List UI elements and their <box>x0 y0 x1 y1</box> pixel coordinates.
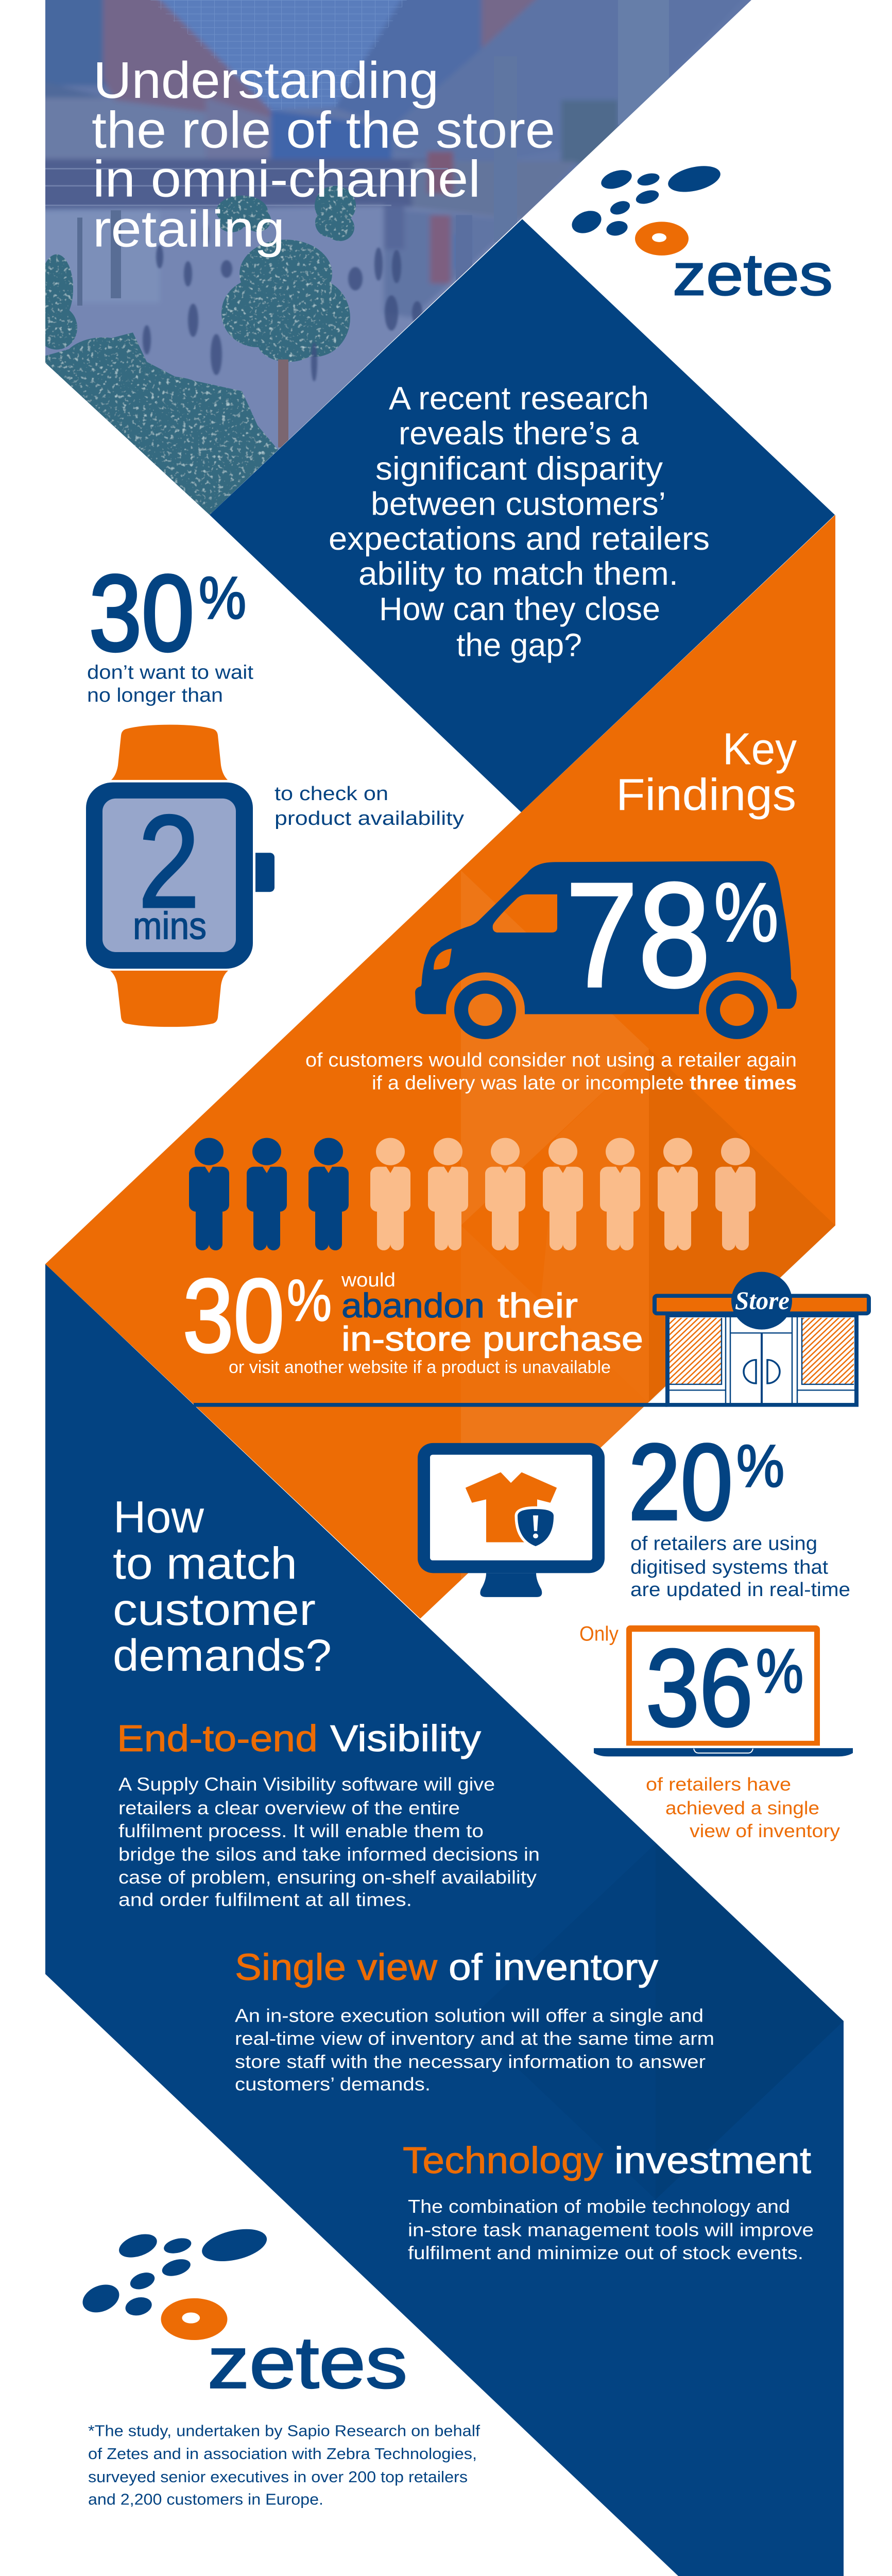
people row: 3 in 10 <box>189 1138 756 1250</box>
stat: 30% abandon purchase: abandon <box>341 1287 485 1325</box>
section: single view of inventory: of inventory <box>449 1946 658 1988</box>
section: end-to-end visibility <box>117 1718 540 1910</box>
section: end-to-end visibility: bridge the silos and take informed decisions in <box>118 1843 540 1865</box>
text: late delivery caption <box>305 1049 797 1094</box>
icon: laptop with 36% <box>579 1622 853 1756</box>
section: single view of inventory <box>235 1946 714 2094</box>
logo: zetes bottom <box>78 2224 407 2403</box>
stat: 20% digitised systems: digitised systems that <box>630 1556 828 1578</box>
heading: how to match customer demands: customer <box>113 1585 316 1635</box>
section: single view of inventory: An in-store execution solution will offer a single and <box>235 2005 704 2026</box>
section: single view of inventory: Single view <box>235 1946 438 1988</box>
footnote: and 2,200 customers in Europe. <box>88 2490 323 2508</box>
stat: 30% abandon purchase: would <box>341 1269 396 1291</box>
icon: smartwatch 2 mins: mins <box>133 905 207 947</box>
columns <box>77 0 669 306</box>
text: late delivery caption: three times <box>690 1073 797 1094</box>
stat: 30% abandon purchase: their <box>498 1287 578 1325</box>
intro text: expectations and retailers <box>329 520 710 556</box>
text: late delivery caption: of customers would consider not using a retailer again <box>305 1049 797 1071</box>
icon: laptop with 36%: 36 <box>646 1627 753 1749</box>
heading: key findings <box>616 724 797 820</box>
icon: delivery van with 78% <box>415 852 797 1039</box>
stat: 20% digitised systems: 20 <box>628 1421 733 1543</box>
text: single view of inventory stat <box>646 1774 840 1841</box>
footnote: surveyed senior executives in over 200 top retailers <box>88 2468 468 2486</box>
icon: delivery van with 78%: 78 <box>565 852 711 1018</box>
photo: shopping mall interior with blue tint <box>31 0 762 523</box>
stat: 20% digitised systems: of retailers are using <box>630 1533 817 1554</box>
ceiling grid <box>150 0 407 110</box>
logo: zetes bottom: zetes <box>208 2321 407 2403</box>
icon: laptop with 36%: % <box>756 1637 803 1706</box>
heading: how to match customer demands: demands? <box>113 1631 332 1681</box>
text: single view of inventory stat: view of inventory <box>690 1820 840 1841</box>
section: single view of inventory: customers’ demands. <box>235 2073 431 2094</box>
stat: 30% don't want to wait: don’t want to wait <box>87 662 253 683</box>
footnote: *The study, undertaken by Sapio Research on behalf <box>88 2422 480 2439</box>
intro text: How can they close <box>379 591 660 627</box>
title: Understanding <box>93 50 439 109</box>
icon: monitor with shirt <box>418 1443 605 1597</box>
text: to check on product availability <box>275 783 465 829</box>
section: end-to-end visibility: retailers a clear overview of the entire <box>118 1797 460 1818</box>
section: technology investment: investment <box>614 2140 811 2181</box>
heading: key findings: Findings <box>616 770 796 820</box>
text: to check on product availability: product availability <box>275 808 465 829</box>
divider line to store <box>194 1403 667 1407</box>
intro text: the gap? <box>456 627 582 663</box>
tree trunk <box>278 360 288 447</box>
text: to check on product availability: to check on <box>275 783 388 805</box>
stat: 30% don't want to wait: % <box>199 565 246 632</box>
stat: 30% abandon purchase: in-store purchase <box>341 1320 643 1358</box>
section: single view of inventory: real-time view of inventory and at the same time arm <box>235 2028 714 2049</box>
railing <box>45 168 448 206</box>
section: technology investment: fulfilment and minimize out of stock events. <box>408 2242 803 2263</box>
stat: 30% abandon purchase <box>183 1258 643 1377</box>
section: technology investment: in-store task management tools will improve <box>408 2219 814 2240</box>
heading: how to match customer demands: How <box>113 1493 204 1543</box>
section: end-to-end visibility: Visibility <box>330 1718 481 1759</box>
logo: zetes top <box>568 161 833 308</box>
section: technology investment: Technology <box>403 2140 603 2181</box>
text: late delivery caption: if a delivery was late or incomplete <box>372 1073 684 1094</box>
stat: 30% don't want to wait: no longer than <box>87 685 223 706</box>
heading: key findings: Key <box>723 724 797 774</box>
icon: smartwatch 2 mins <box>86 725 275 1027</box>
heading: how to match customer demands: to match <box>113 1539 297 1589</box>
title: the role of the store <box>92 100 555 159</box>
stat: 30% don't want to wait <box>87 552 253 706</box>
stat: 30% abandon purchase: % <box>287 1267 332 1333</box>
section: end-to-end visibility: A Supply Chain Visibility software will give <box>118 1774 495 1794</box>
icon: store front <box>655 1272 869 1405</box>
stat: 20% digitised systems: are updated in real-time <box>630 1579 850 1601</box>
people <box>143 224 422 381</box>
section: end-to-end visibility: End-to-end <box>117 1718 318 1759</box>
section: technology investment <box>403 2140 814 2263</box>
icon: store front: Store <box>735 1286 790 1315</box>
section: technology investment: The combination of mobile technology and <box>408 2196 790 2217</box>
footnote: of Zetes and in association with Zebra Technologies, <box>88 2445 477 2463</box>
stat: 30% don't want to wait: 30 <box>89 552 194 673</box>
logo: zetes top: zetes <box>673 241 833 308</box>
panel: blue how to match <box>45 1264 844 2576</box>
title: in omni-channel <box>93 149 481 208</box>
section: end-to-end visibility: fulfilment process. It will enable them to <box>118 1820 484 1841</box>
intro text: reveals there’s a <box>399 415 639 451</box>
intro text: between customers’ <box>371 486 666 522</box>
section: end-to-end visibility: case of problem, ensuring on-shelf availability <box>118 1867 537 1888</box>
stat: 20% digitised systems: % <box>736 1433 784 1500</box>
orange facets <box>461 870 835 1581</box>
foliage <box>36 186 356 515</box>
stat: 30% abandon purchase: 30 <box>183 1258 284 1374</box>
icon: laptop with 36%: Only <box>579 1622 619 1645</box>
blue facets <box>468 1843 844 2199</box>
intro text: A recent research <box>389 380 649 416</box>
title <box>92 50 555 258</box>
intro text: ability to match them. <box>358 556 678 592</box>
stat: 20% digitised systems <box>628 1421 850 1601</box>
panel: blue intro diamond <box>210 219 835 812</box>
stat: 30% abandon purchase: or visit another website if a product is unavailable <box>229 1358 611 1377</box>
icon: smartwatch 2 mins: 2 <box>138 788 200 935</box>
text: single view of inventory stat: of retailers have <box>646 1774 791 1794</box>
title: retailing <box>93 199 285 258</box>
intro text <box>329 380 710 663</box>
intro text: significant disparity <box>375 451 663 487</box>
text: single view of inventory stat: achieved a single <box>665 1797 819 1818</box>
section: single view of inventory: store staff with the necessary information to answer <box>235 2051 706 2072</box>
footnote <box>88 2422 480 2508</box>
heading: how to match customer demands <box>113 1493 332 1681</box>
panel: orange key findings <box>45 515 835 1619</box>
section: end-to-end visibility: and order fulfilment at all times. <box>118 1889 412 1910</box>
icon: delivery van with 78%: % <box>714 865 779 959</box>
